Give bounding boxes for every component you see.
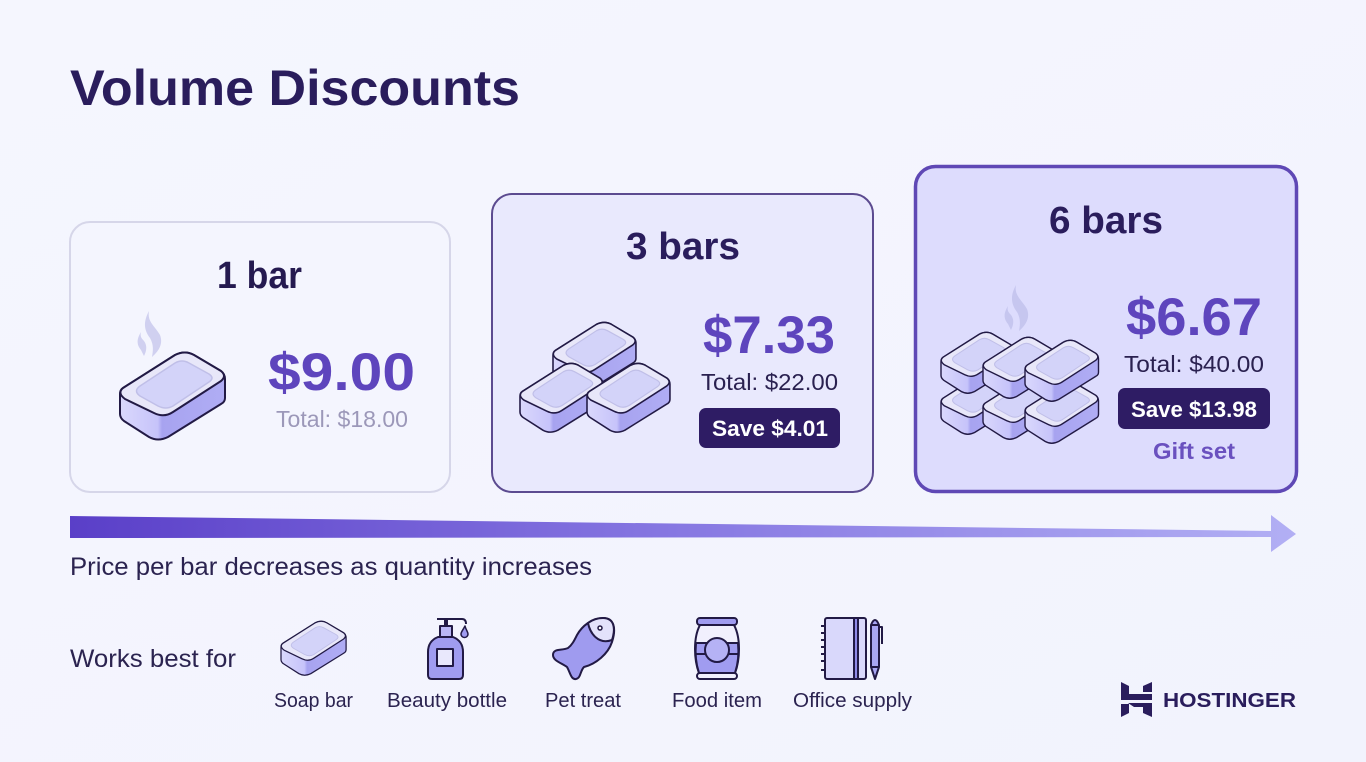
item: pet treat: [545, 618, 621, 712]
badge: save 13.98: [1118, 388, 1270, 429]
badge: save 4.01: [699, 408, 840, 448]
heading: 3 bars: 3 bars: [626, 226, 740, 268]
icon: food jar: [695, 618, 739, 679]
panel: 3 bars: [492, 194, 873, 492]
panel: 6 bars: [916, 166, 1296, 492]
item: soap bar: [274, 621, 353, 712]
item: food item: [672, 618, 762, 712]
heading: 6 bars: 6 bars: [1049, 200, 1163, 242]
icon: single soap with steam: [120, 311, 225, 440]
heading: 1 bar: 1 bar: [217, 255, 302, 297]
total: 22.00: Total: $22.00: [701, 369, 838, 395]
heading: works best for: Works best for: [70, 645, 236, 673]
logo: hostinger: [1121, 682, 1297, 717]
icon: soap bar: [281, 621, 346, 675]
price: 9.00: $9.00: [268, 343, 415, 402]
price: 6.67: $6.67: [1126, 288, 1262, 347]
icon: notebook and pen: [821, 618, 882, 679]
total: 18.00: Total: $18.00: [276, 406, 408, 432]
item: beauty bottle: [387, 619, 507, 712]
badge: save 4.01: Save $4.01: [712, 416, 828, 441]
label: office supply: Office supply: [793, 690, 912, 712]
badge: save 13.98: Save $13.98: [1131, 397, 1257, 422]
price: 7.33: $7.33: [703, 306, 835, 365]
caption: price trend: Price per bar decreases as quantity increases: [70, 553, 592, 581]
label: beauty bottle: Beauty bottle: [387, 690, 507, 712]
label: pet treat: Pet treat: [545, 690, 621, 712]
label: food item: Food item: [672, 690, 762, 712]
total: 40.00: Total: $40.00: [1124, 351, 1264, 377]
item: office supply: [793, 618, 912, 712]
logo mark: [1121, 682, 1152, 717]
label: soap bar: Soap bar: [274, 690, 353, 712]
arrow: price trend: [70, 515, 1296, 552]
title: Volume Discounts: [70, 60, 520, 116]
label: gift set: Gift set: [1153, 438, 1235, 464]
icon: fish: [553, 618, 614, 679]
icon: three soaps: [520, 322, 670, 432]
icon: beauty bottle: [428, 619, 468, 679]
wordmark: HOSTINGER: [1163, 690, 1297, 712]
icon: six soaps with steam: [941, 285, 1098, 443]
panel: 1 bar: [70, 222, 450, 492]
